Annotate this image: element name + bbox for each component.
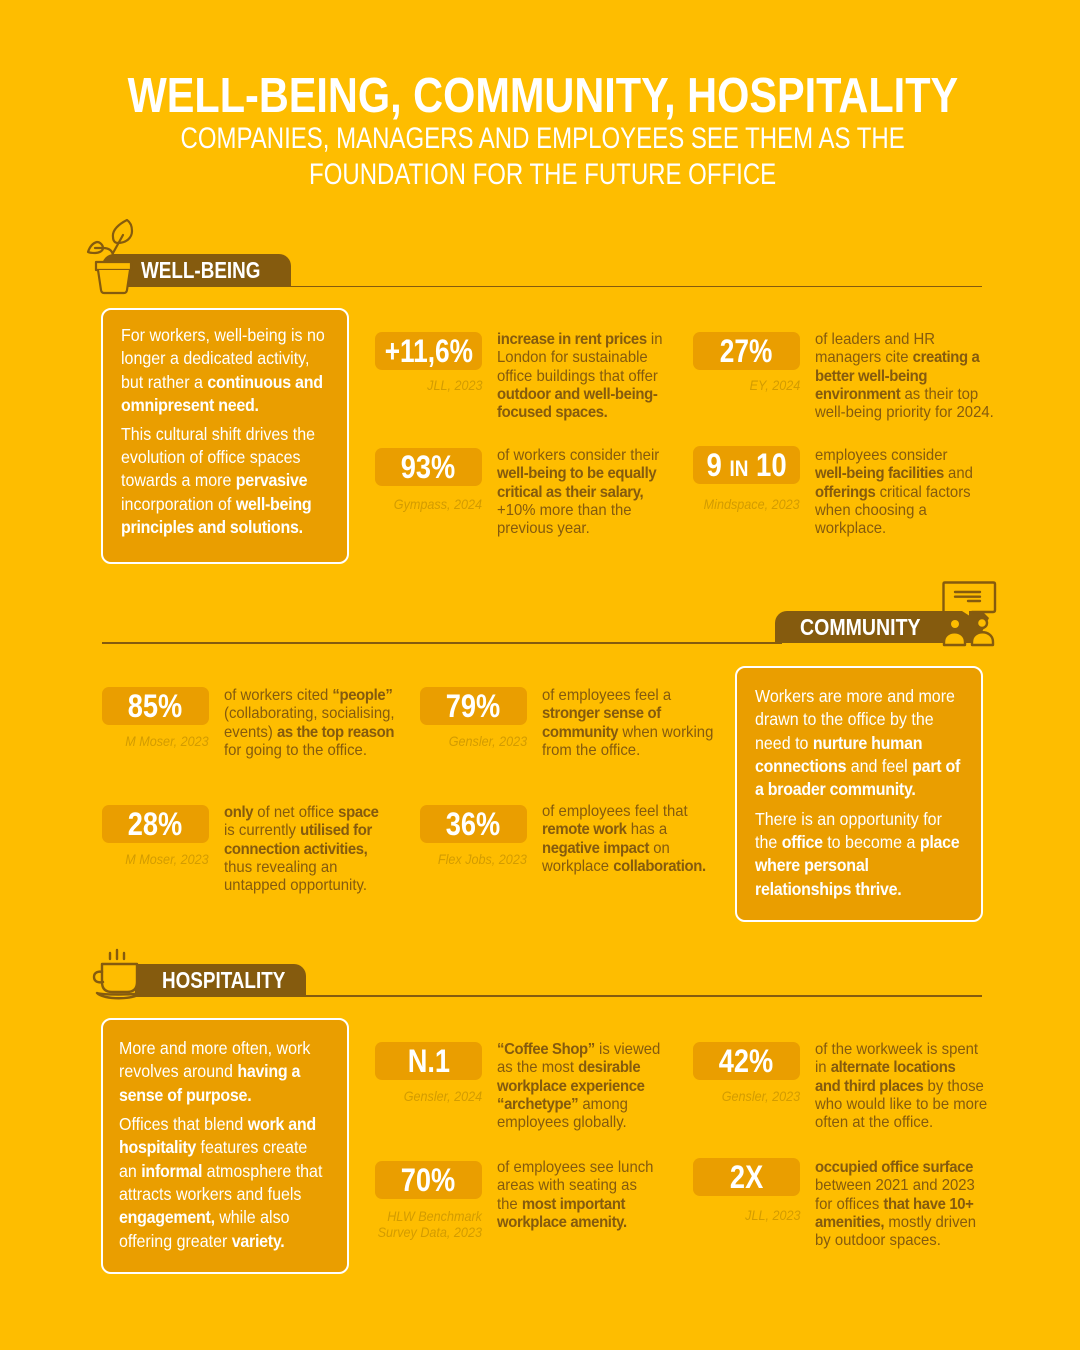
stat: 42%: of the workweek is spent [815,1041,978,1058]
stat: 27%: managers cite creating a [815,349,979,366]
stat: 28%: untapped opportunity. [224,877,367,894]
section heading: community [775,611,972,643]
stat: 2X: JLL, 2023 [745,1207,800,1223]
stat: +11,6% [375,331,662,421]
section: well-being [86,218,994,564]
stat: N.1: “Coffee Shop” is viewed [497,1041,660,1058]
stat: 9 in 10: well-being facilities and [815,465,973,482]
stat: 42%: in alternate locations [815,1059,955,1076]
stat: 27%: EY, 2024 [749,377,800,393]
subtitle: COMPANIES, MANAGERS AND EMPLOYEES SEE THEM AS THE [181,122,905,155]
panel text: revolves around having a [119,1061,300,1081]
section heading: hospitality [135,964,306,997]
stat: 93%: of workers consider their [497,447,659,464]
stat: +11,6%: JLL, 2023 [427,377,482,393]
section heading: well-being: WELL-BEING [141,257,260,283]
panel text: connections and feel part of [755,756,960,776]
panel text: There is an opportunity for [755,808,942,828]
panel text: principles and solutions. [121,517,303,537]
stat: N.1: workplace experience [497,1078,645,1095]
stat: 36% [420,803,706,875]
panel text [119,1114,322,1251]
section heading: community: COMMUNITY [800,614,921,640]
stat: +11,6%: London for sustainable [497,349,648,366]
stat: 27%: of leaders and HR [815,331,935,348]
stat: 93%: +10% more than the [497,502,632,519]
stat: 79%: stronger sense of [542,705,661,722]
stat: 70%: Survey Data, 2023 [378,1224,482,1240]
stat: 2X: between 2021 and 2023 [815,1177,975,1194]
stat: 79% [420,687,713,759]
icon: coffee cup [92,948,138,1000]
panel text: omnipresent need. [121,395,259,415]
section heading: well-being [102,254,291,287]
stat: 9 in 10: workplace. [815,520,886,537]
stat: 28%: 28% [128,806,183,842]
stat: 28%: thus revealing an [224,859,337,876]
panel: hospitality summary [101,1018,349,1274]
stat: 79%: community when working [542,724,713,741]
stat: 9 in 10 [693,446,973,537]
stat: 70%: of employees see lunch [497,1159,653,1176]
subtitle: FOUNDATION FOR THE FUTURE OFFICE [309,158,777,191]
stat: 28%: connection activities, [224,841,367,858]
stat: 9 in 10: Mindspace, 2023 [704,496,800,512]
panel text: longer a dedicated activity, [121,348,309,368]
panel text: sense of purpose. [119,1085,251,1105]
stat: 79%: of employees feel a [542,687,671,704]
panel: community summary [735,666,983,922]
stat: 42%: and third places by those [815,1078,984,1095]
section: hospitality [92,948,987,1274]
panel text: relationships thrive. [755,879,901,899]
stat: 85%: M Moser, 2023 [126,733,209,749]
stat: 93%: well-being to be equally [497,465,656,482]
stat: 2X: 2X [730,1159,763,1195]
stat: 42%: often at the office. [815,1114,933,1131]
stat: 85%: of workers cited “people” [224,687,392,704]
stat: 70%: HLW Benchmark [387,1208,482,1224]
stat: 85%: for going to the office. [224,742,367,759]
panel text [121,325,325,415]
stat: 27%: 27% [720,333,773,369]
stat: 9 in 10: when choosing a [815,502,927,519]
stat: 28% [102,804,379,894]
stat: 9 in 10: offerings critical factors [815,484,971,501]
icon: potted plant [86,218,134,294]
stat: 28%: only of net office space [224,804,379,821]
stat: 36%: workplace collaboration. [542,858,706,875]
panel text: an informal atmosphere that [119,1161,322,1181]
stat: 9 in 10: employees consider [815,447,947,464]
stat: N.1: as the most desirable [497,1059,640,1076]
stat: 70%: 70% [401,1162,456,1198]
stat: 93%: 93% [401,449,456,485]
stat: 93%: previous year. [497,520,590,537]
title: WELL-BEING, COMMUNITY, HOSPITALITY [128,69,958,123]
panel text: drawn to the office by the [755,709,934,729]
panel text: a broader community. [755,779,916,799]
stat: 2X: occupied office surface [815,1159,973,1176]
stat: 42%: Gensler, 2023 [722,1088,800,1104]
stat: 27% [693,331,994,421]
stat: 42%: who would like to be more [815,1096,987,1113]
stat: 70% [375,1159,653,1240]
stat: 79%: 79% [446,688,501,724]
panel: well-being summary [101,308,349,564]
stat: N.1: N.1 [407,1043,450,1079]
stat: 36%: Flex Jobs, 2023 [438,851,527,867]
stat: 9 in 10: 9 IN 10 [706,447,787,483]
stat: 36%: of employees feel that [542,803,688,820]
panel text: evolution of office spaces [121,447,301,467]
stat: N.1: “archetype” among [497,1096,628,1113]
stat: 70%: the most important [497,1196,625,1213]
stat: 93% [375,447,659,537]
stat: 79%: Gensler, 2023 [449,733,527,749]
panel text: More and more often, work [119,1038,310,1058]
panel text: towards a more pervasive [121,470,307,490]
panel text: the office to become a place [755,832,959,852]
stat: +11,6%: outdoor and well-being- [497,386,657,403]
stat: N.1: Gensler, 2024 [404,1088,482,1104]
stat: 93%: critical as their salary, [497,484,643,501]
stat: 27%: better well-being [815,368,927,385]
stat: 27%: environment as their top [815,386,978,403]
panel text [755,808,960,899]
stat: 27%: well-being priority for 2024. [815,404,994,421]
panel text [119,1038,310,1105]
section: community [102,581,996,922]
stat: 28%: M Moser, 2023 [126,851,209,867]
stat: 70%: areas with seating as [497,1177,637,1194]
stat: 2X: for offices that have 10+ [815,1196,974,1213]
stat: 42%: 42% [719,1043,774,1079]
panel text: offering greater variety. [119,1231,284,1251]
icon: speech bubble and people [942,581,996,646]
panel text: where personal [755,855,869,875]
stat: +11,6%: increase in rent prices in [497,331,662,348]
panel text: but rather a continuous and [121,372,323,392]
stat: 2X: amenities, mostly driven [815,1214,976,1231]
panel text [755,686,960,799]
section heading: hospitality: HOSPITALITY [162,967,285,993]
stat: 70%: workplace amenity. [497,1214,627,1231]
stat: 85%: (collaborating, socialising, [224,705,395,722]
stat: 42% [693,1041,987,1131]
panel text: This cultural shift drives the [121,424,315,444]
subtitle [181,122,905,191]
stat: +11,6%: focused spaces. [497,404,607,421]
panel text: For workers, well-being is no [121,325,325,345]
stat: 28%: is currently utilised for [224,822,372,839]
stat: 93%: Gympass, 2024 [394,496,482,512]
stat: +11,6%: +11,6% [385,333,473,369]
stat: 85% [102,687,395,759]
header [128,69,958,191]
stat: N.1 [375,1041,660,1131]
panel text: incorporation of well-being [121,494,311,514]
panel text: engagement, while also [119,1207,290,1227]
stat: 85%: events) as the top reason [224,724,394,741]
panel text: Workers are more and more [755,686,955,706]
panel text: attracts workers and fuels [119,1184,301,1204]
stat: 2X [693,1158,976,1249]
panel text: Offices that blend work and [119,1114,316,1134]
stat: 85%: 85% [128,688,183,724]
stat: 79%: from the office. [542,742,640,759]
stat: 36%: remote work has a [542,821,667,838]
stat: 2X: by outdoor spaces. [815,1232,941,1249]
stat: +11,6%: office buildings that offer [497,368,658,385]
panel text [121,424,315,537]
stat: 36%: negative impact on [542,840,670,857]
stat: 36%: 36% [446,806,501,842]
panel text: hospitality features create [119,1137,307,1157]
stat: N.1: employees globally. [497,1114,627,1131]
panel text: need to nurture human [755,733,922,753]
